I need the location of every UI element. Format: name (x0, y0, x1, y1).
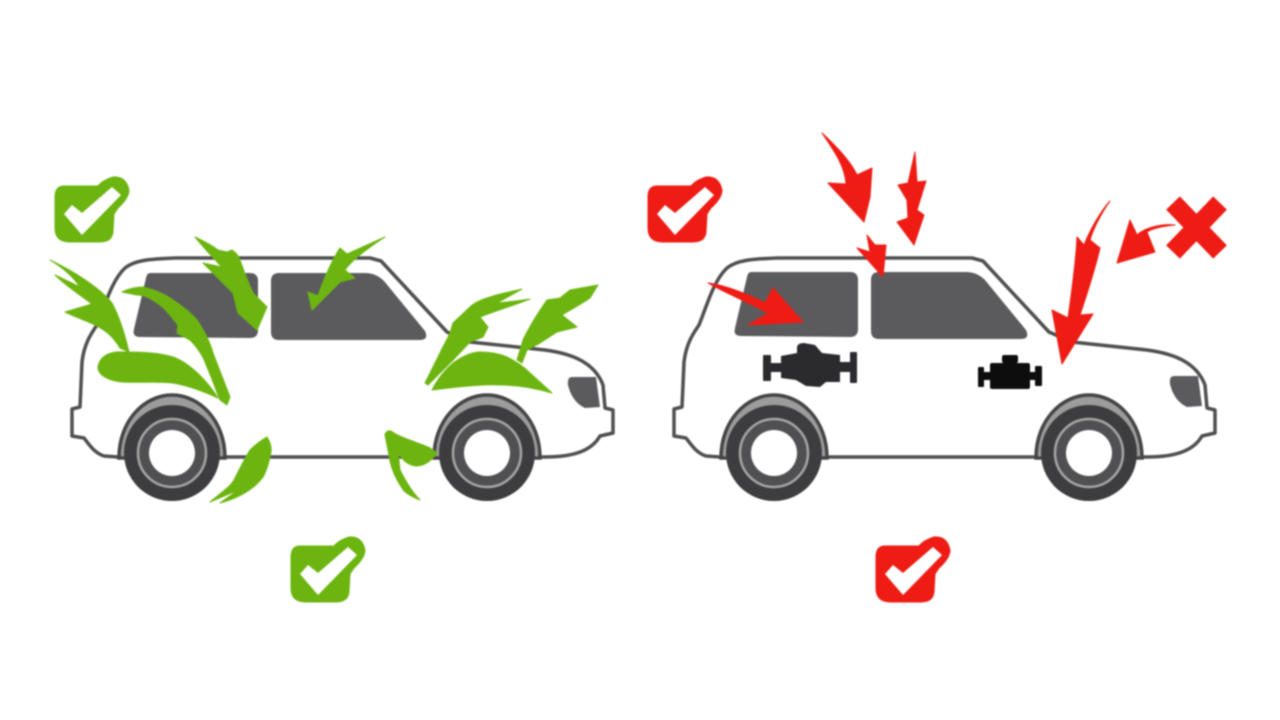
rear wheel (721, 395, 827, 501)
red arrows (708, 133, 1175, 364)
icon: large engine (763, 343, 857, 387)
red check badge top (648, 177, 722, 242)
rear window (134, 273, 258, 338)
red check badge bottom (876, 537, 950, 602)
green check badge top (55, 177, 129, 242)
green air flow leaves (50, 237, 598, 503)
green check badge bottom (291, 537, 365, 602)
icon: red cross (1173, 203, 1220, 252)
front wheel (1036, 395, 1142, 501)
panel: red car (648, 133, 1220, 602)
headlight (568, 377, 600, 408)
front window (871, 272, 1027, 339)
car body outline (674, 258, 1215, 457)
rear wheel (119, 395, 225, 501)
icon: small engine (978, 355, 1042, 389)
front wheel (434, 395, 540, 501)
rear window (735, 272, 858, 337)
front window (271, 273, 426, 340)
car body outline (72, 258, 613, 457)
panel: green car (50, 177, 613, 602)
headlight (1170, 376, 1202, 407)
